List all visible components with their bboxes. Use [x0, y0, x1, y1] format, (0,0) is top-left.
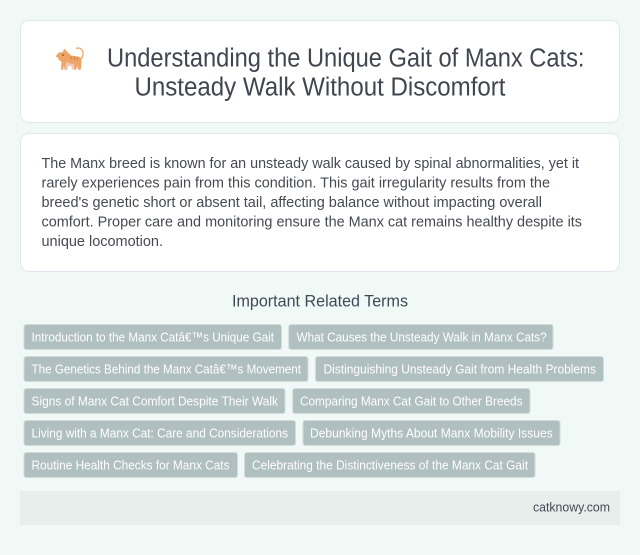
- title text: [107, 45, 584, 102]
- description text: breed's genetic short or absent tail, affecting balance without impacting overall: [42, 194, 542, 211]
- tag: [24, 388, 285, 414]
- tag group: related terms: [24, 324, 604, 478]
- description text: unique locomotion.: [42, 233, 163, 250]
- panel: description: [20, 134, 620, 272]
- tag: Distinguishing Unsteady Gait from Health Problems: [324, 362, 596, 376]
- tag: [244, 452, 535, 478]
- tag: [303, 420, 560, 446]
- tag: Routine Health Checks for Manx Cats: [32, 458, 230, 472]
- heading: important related terms: Important Related Terms: [232, 293, 408, 311]
- title text: Understanding the Unique Gait of Manx Cats:: [107, 45, 584, 73]
- description text: [42, 155, 582, 250]
- title text: Unsteady Walk Without Discomfort: [134, 74, 506, 102]
- tag: Comparing Manx Cat Gait to Other Breeds: [300, 394, 523, 408]
- description text: The Manx breed is known for an unsteady walk caused by spinal abnormalities, yet it: [42, 155, 580, 172]
- tag: [316, 356, 604, 382]
- tag: [24, 452, 238, 478]
- tag: What Causes the Unsteady Walk in Manx Cats?: [296, 330, 547, 344]
- footer source text: catknowy.com: [533, 500, 610, 515]
- tag: [289, 324, 553, 350]
- tag: [24, 324, 282, 350]
- panel: title card: [20, 20, 620, 122]
- tag: Introduction to the Manx Catâ€™s Unique Gait: [32, 330, 274, 344]
- tag: Celebrating the Distinctiveness of the Manx Cat Gait: [252, 458, 528, 472]
- icon: cat: [56, 48, 83, 70]
- tag: Debunking Myths About Manx Mobility Issues: [310, 426, 553, 440]
- tag: The Genetics Behind the Manx Catâ€™s Movement: [32, 362, 301, 376]
- tag: Signs of Manx Cat Comfort Despite Their Walk: [32, 394, 278, 408]
- tag: Living with a Manx Cat: Care and Considerations: [32, 426, 288, 440]
- description text: comfort. Proper care and monitoring ensure the Manx cat remains healthy despite its: [42, 214, 582, 230]
- tag: [24, 356, 308, 382]
- footer bar: [20, 491, 620, 525]
- tag: [293, 388, 530, 414]
- tag: [24, 420, 296, 446]
- description text: rarely experiences pain from this condition. This gait irregularity results from the: [42, 174, 550, 192]
